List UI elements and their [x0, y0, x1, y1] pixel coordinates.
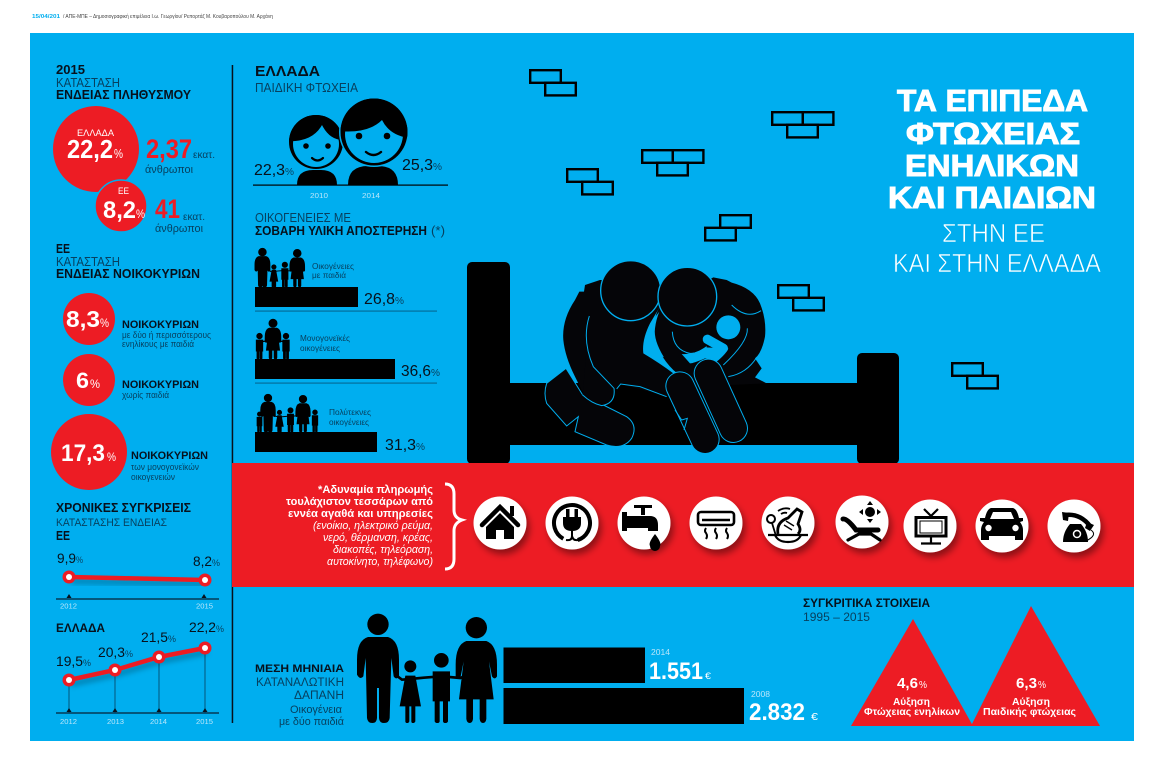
heading: household deprivation — [56, 242, 200, 281]
stat: 22.3% in 2010: % — [285, 167, 294, 178]
heading: population deprivation: 2015 — [56, 63, 85, 77]
stat: 22.3% in 2010: 22,3 — [254, 162, 285, 179]
bar: large families 31.3%: Πολύτεκνες — [329, 407, 371, 417]
bubble: 8.3% households: % — [100, 316, 109, 330]
line chart: Greece: ΕΛΛΑΔΑ — [56, 621, 105, 635]
header credit line: / ΑΠΕ-ΜΠΕ – Δημοσιογραφική επιμέλεια Ι.ω. Γεωργίου/ Ρεπορτάζ Μ. Κουβαροπούλου Μ. Αρχάνη — [63, 13, 273, 20]
bar: families with children 26.8% — [255, 248, 437, 311]
bar: families with children 26.8%: 26,8 — [364, 291, 395, 308]
triangle: child poverty increase: Παιδικής φτώχειας — [983, 707, 1076, 718]
text: definition of deprivation: διακοπές, τηλεόραση, — [333, 544, 433, 556]
heading: severe material deprivation — [255, 211, 445, 238]
icon: water tap — [618, 496, 670, 551]
bubble: EU 8.2% — [95, 180, 147, 232]
heading: severe material deprivation: ΟΙΚΟΓΕΝΕΙΕΣ ΜΕ — [255, 211, 351, 225]
title: ΤΑ ΕΠΙΠΕΔΑ — [897, 83, 1088, 118]
title — [888, 83, 1102, 278]
text: definition of deprivation: *Αδυναμία πληρωμής — [318, 484, 433, 496]
stat: 2.37 million people: 2,37 — [146, 134, 192, 164]
bar: families with children 26.8%: % — [395, 296, 404, 307]
line chart: Greece: % — [83, 658, 91, 668]
bar: single-parent families 36.6%: οικογένειες — [300, 343, 340, 353]
bed — [467, 262, 899, 464]
text: spending heading: Οικογένεια — [290, 704, 343, 716]
brace — [445, 484, 462, 569]
triangle: adult poverty increase — [851, 619, 973, 726]
panel: time comparisons — [56, 501, 224, 726]
stat: 2.37 million people: άνθρωποι — [145, 164, 194, 176]
bar: large families 31.3%: οικογένειες — [329, 417, 369, 427]
bubble: EU 8.2%: ΕΕ — [118, 186, 129, 196]
icon: sun lounger — [836, 496, 888, 548]
title: ΚΑΙ ΠΑΙΔΙΩΝ — [888, 180, 1096, 215]
stat: 2.37 million people — [145, 134, 215, 176]
bubble: EU 8.2%: % — [136, 207, 145, 221]
bar: large families 31.3%: 31,3 — [385, 437, 416, 454]
vertical divider — [232, 65, 233, 723]
heading: time comparisons — [56, 501, 191, 543]
bar: single-parent families 36.6%: Μονογονεϊκές — [300, 333, 350, 343]
heading: severe material deprivation: ΣΟΒΑΡΗ ΥΛΙΚΗ ΑΠΟΣΤΕΡΗΣΗ — [255, 224, 427, 238]
text: definition of deprivation: τουλάχιστον τεσσάρων από — [286, 496, 433, 508]
triangle: child poverty increase: Αύξηση — [1012, 697, 1050, 708]
bar: 2014 spending — [504, 648, 711, 685]
text: definition of deprivation: (ενοίκιο, ηλεκτρικό ρεύμα, — [313, 520, 433, 532]
panel: child poverty in Greece — [253, 63, 448, 200]
triangle: child poverty increase — [971, 606, 1100, 726]
icon: house — [474, 496, 526, 550]
figures — [545, 261, 767, 446]
text: definition of deprivation: εννέα αγαθά και υπηρεσίες — [288, 508, 433, 520]
bubble: 17.3% households: % — [107, 450, 116, 464]
bubble: Greece 22.2% — [53, 106, 139, 192]
bubble: Greece 22.2%: ΕΛΛΑΔΑ — [77, 128, 114, 138]
title: ΕΝΗΛΙΚΩΝ — [905, 148, 1079, 183]
heading: time comparisons: ΚΑΤΑΣΤΑΣΗΣ ΕΝΔΕΙΑΣ — [56, 517, 167, 529]
bubble: 6% households: ΝΟΙΚΟΚΥΡΙΩΝ — [122, 379, 199, 391]
bar: 2008 spending: 2.832 — [749, 699, 805, 726]
line chart: EU: 9,9 — [57, 551, 76, 566]
stat: 22.3% in 2010 — [254, 162, 328, 200]
heading: severe material deprivation: (*) — [431, 224, 445, 238]
bubble: 8.3% households: 8,3 — [66, 306, 100, 332]
stat: 25.3% in 2014 — [362, 157, 442, 200]
line chart: Greece: 2012 — [60, 717, 77, 726]
header credit line: 15/04/201 — [32, 14, 60, 20]
line chart: EU: 2015 — [196, 602, 213, 610]
triangle: child poverty increase: 6,3 — [1016, 675, 1037, 692]
line chart: EU: 8,2 — [193, 554, 212, 569]
text: spending heading: ΚΑΤΑΝΑΛΩΤΙΚΗ — [256, 677, 344, 689]
bubble: Greece 22.2%: % — [114, 146, 123, 161]
bar: single-parent families 36.6%: 36,6 — [401, 363, 431, 380]
heading: comparative data: 1995 – 2015 — [803, 610, 870, 624]
text: spending heading: με δύο παιδιά — [279, 716, 345, 728]
triangle: adult poverty increase: Αύξηση — [893, 697, 930, 708]
heading: population deprivation: ΚΑΤΑΣΤΑΣΗ — [56, 76, 120, 90]
bar: single-parent families 36.6% — [255, 319, 440, 383]
bar: families with children 26.8%: με παιδιά — [312, 270, 346, 280]
heading: comparative data: ΣΥΓΚΡΙΤΙΚΑ ΣΤΟΙΧΕΙΑ — [803, 598, 930, 610]
bar: large families 31.3% — [255, 394, 425, 454]
bubble: EU 8.2%: 8,2 — [103, 197, 136, 224]
line chart: EU — [56, 551, 220, 610]
line chart: Greece: 2013 — [107, 717, 124, 726]
title: ΦΤΩΧΕΙΑΣ — [906, 116, 1080, 151]
heading: household deprivation: ΕΝΔΕΙΑΣ ΝΟΙΚΟΚΥΡΙΩΝ — [56, 267, 200, 281]
bar: 2014 spending: € — [705, 671, 711, 681]
heading: child poverty — [255, 63, 359, 95]
panel: average monthly spending — [255, 614, 819, 728]
bar: families with children 26.8%: Οικογένειες — [312, 261, 354, 271]
heading: comparative data — [803, 598, 930, 624]
icon: telephone — [1048, 500, 1100, 552]
bubble: 17.3% households: ΝΟΙΚΟΚΥΡΙΩΝ — [131, 450, 208, 462]
bar: 2008 spending: € — [811, 712, 819, 723]
panel: population deprivation 2015 — [53, 63, 215, 235]
panel: red band, goods and services — [232, 463, 1134, 587]
bubble: 6% households: 6 — [76, 368, 89, 393]
stat: 41 million people — [155, 194, 205, 235]
bubble: 8.3% households: ΝΟΙΚΟΚΥΡΙΩΝ — [122, 319, 199, 331]
heading: time comparisons: ΧΡΟΝΙΚΕΣ ΣΥΓΚΡΙΣΕΙΣ — [56, 501, 191, 515]
heading: household deprivation: ΚΑΤΑΣΤΑΣΗ — [56, 255, 120, 269]
icon: car — [976, 500, 1028, 552]
line chart: Greece: 20,3 — [98, 644, 125, 660]
stat: 41 million people: άνθρωποι — [155, 223, 204, 235]
bar: 2008 spending: 2008 — [751, 690, 771, 699]
illustration: family huddled on a bed — [467, 261, 899, 464]
bar: 2014 spending: 1.551 — [649, 658, 703, 685]
heading: population deprivation: ΕΝΔΕΙΑΣ ΠΛΗΘΥΣΜΟΥ — [56, 88, 192, 102]
text: definition of deprivation: νερό, θέρμανση, κρέας, — [323, 532, 433, 544]
bubble: 8.3% households — [63, 293, 212, 349]
heading: population deprivation — [56, 63, 192, 102]
bubble: 6% households — [63, 354, 199, 406]
triangle: child poverty increase: % — [1038, 680, 1046, 691]
icon: family of four — [357, 614, 497, 723]
panel: EU household deprivation — [51, 242, 212, 490]
text: spending heading: ΔΑΠΑΝΗ — [294, 690, 344, 702]
text: definition of deprivation — [286, 484, 433, 568]
bubble: 8.3% households: με δύο ή περισσότερους — [122, 330, 212, 340]
text: spending heading — [255, 663, 345, 728]
bar: 2008 spending — [504, 688, 819, 726]
icon: meat dish — [762, 496, 814, 550]
line chart: Greece: 19,5 — [56, 653, 83, 669]
line chart: Greece: 22,2 — [189, 619, 216, 635]
icon: plug — [546, 496, 598, 550]
line chart: Greece: 21,5 — [141, 629, 168, 645]
stat: 22.3% in 2010: 2010 — [310, 191, 328, 200]
stat: 41 million people: 41 — [155, 194, 180, 224]
icon: air conditioner — [690, 496, 742, 550]
bar: large families 31.3%: % — [416, 442, 425, 453]
bar: 2014 spending: 2014 — [651, 648, 671, 657]
panel: severe material deprivation — [255, 211, 445, 454]
text: definition of deprivation: αυτοκίνητο, τηλέφωνο) — [327, 556, 433, 568]
stat: 25.3% in 2014: 25,3 — [402, 157, 433, 174]
bubble: 6% households: χωρίς παιδιά — [122, 390, 169, 400]
heading: child poverty: ΠΑΙΔΙΚΗ ΦΤΩΧΕΙΑ — [255, 81, 359, 95]
title: ΣΤΗΝ ΕΕ — [942, 218, 1045, 248]
title: ΚΑΙ ΣΤΗΝ ΕΛΛΑΔΑ — [893, 248, 1102, 278]
stat: 25.3% in 2014: % — [433, 162, 442, 173]
panel: comparative data 1995-2015 — [803, 598, 1100, 726]
stat: 41 million people: εκατ. — [183, 211, 205, 223]
bubble: 17.3% households — [51, 414, 208, 490]
line chart: EU: 2012 — [60, 602, 77, 610]
icon: television — [904, 500, 956, 552]
icon: two children — [253, 95, 448, 186]
line chart: Greece: 2014 — [150, 717, 167, 726]
bubble: 17.3% households: 17,3 — [61, 440, 105, 467]
bubble: 17.3% households: οικογενειών — [131, 472, 175, 482]
bubble: 6% households: % — [90, 377, 100, 391]
bubble: 8.3% households: ενηλίκους με παιδιά — [122, 339, 194, 349]
line chart: Greece: 2015 — [196, 717, 213, 726]
triangle: adult poverty increase: % — [919, 680, 927, 691]
bricks decoration — [530, 70, 998, 388]
line chart: EU: % — [212, 558, 220, 568]
stat: 2.37 million people: εκατ. — [193, 149, 215, 161]
heading: household deprivation: ΕΕ — [56, 242, 70, 256]
stat: 25.3% in 2014: 2014 — [362, 191, 380, 200]
heading: time comparisons: ΕΕ — [56, 529, 70, 543]
triangle: adult poverty increase: 4,6 — [897, 675, 918, 692]
line chart: Greece: % — [216, 624, 224, 634]
bubble: 17.3% households: των μονογονεϊκών — [131, 462, 199, 472]
line chart: EU: % — [76, 555, 83, 565]
bubble: Greece 22.2%: 22,2 — [67, 134, 113, 164]
triangle: adult poverty increase: Φτώχειας ενηλίκων — [864, 707, 960, 718]
bar: single-parent families 36.6%: % — [431, 368, 440, 379]
line chart: Greece: % — [125, 649, 133, 659]
line chart: Greece — [56, 619, 224, 726]
text: spending heading: ΜΕΣΗ ΜΗΝΙΑΙΑ — [255, 663, 344, 675]
line chart: Greece: % — [168, 634, 176, 644]
heading: child poverty: ΕΛΛΑΔΑ — [255, 63, 320, 80]
